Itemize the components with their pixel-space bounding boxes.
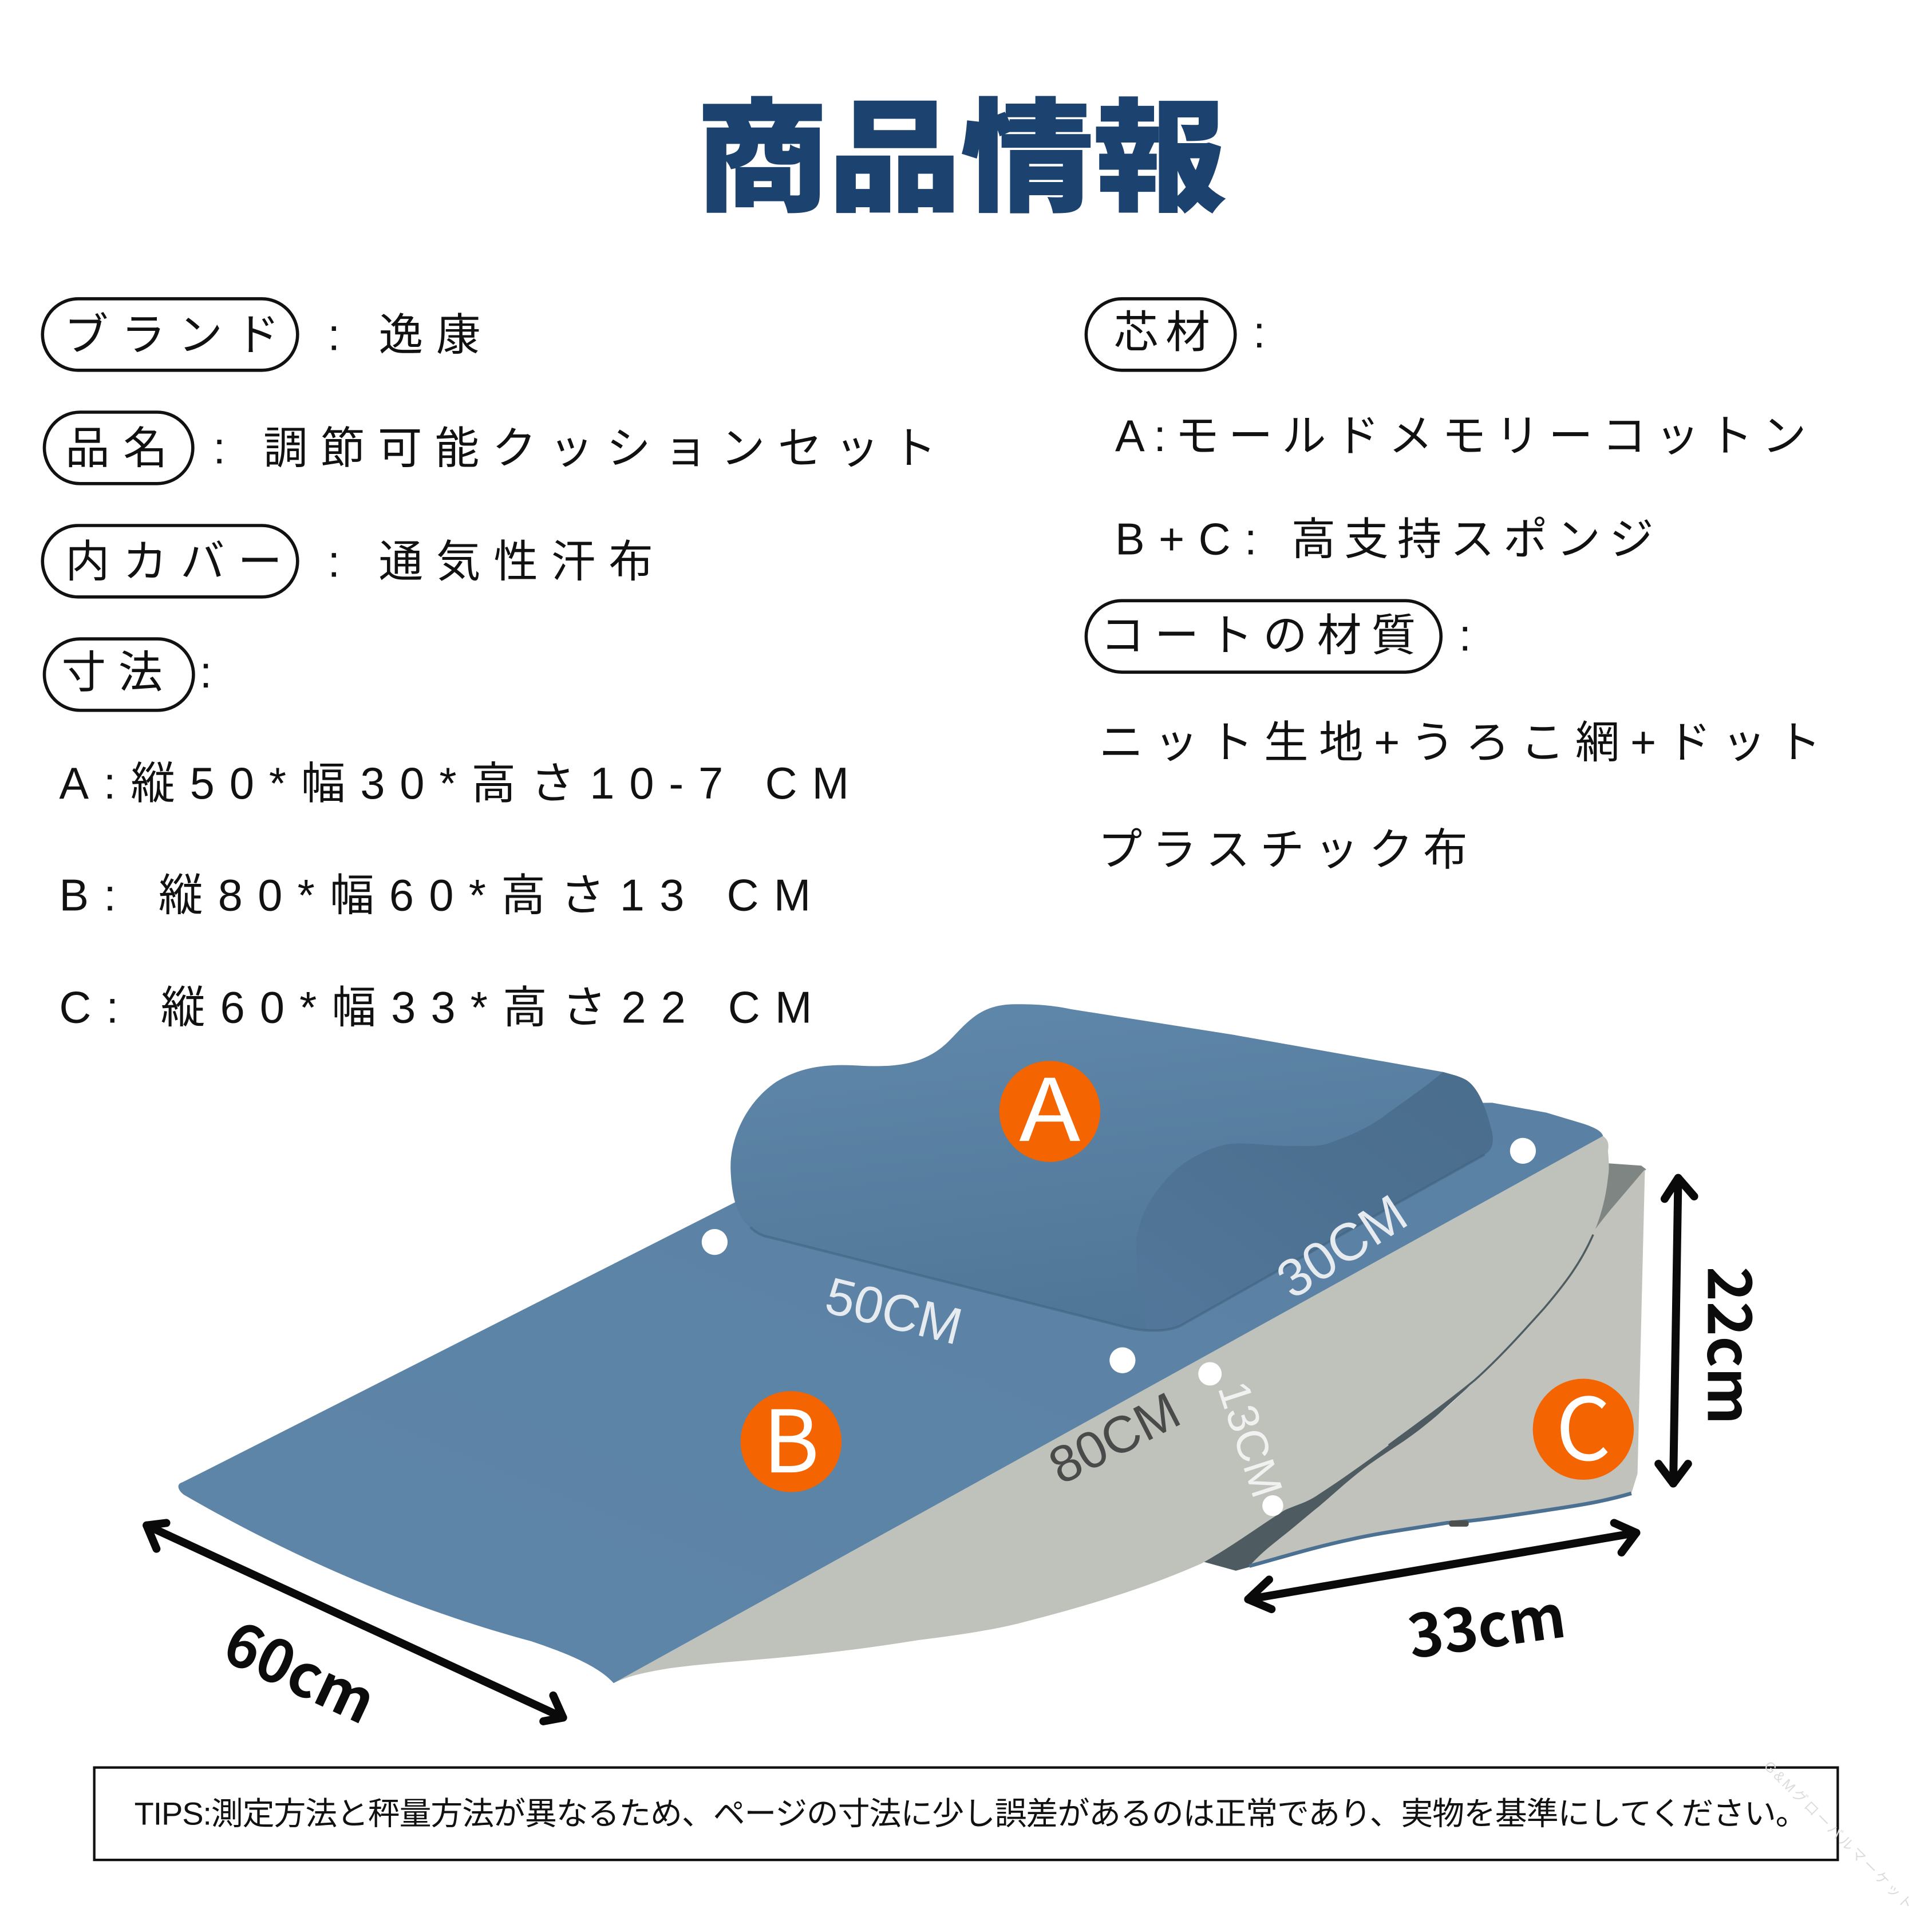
label: dimensions xyxy=(44,639,193,710)
dimension: 60cm: 60cm xyxy=(212,1596,392,1741)
wedge C xyxy=(1200,1163,1646,1570)
tips box xyxy=(94,1768,1838,1860)
panel: left spec list xyxy=(42,299,937,1033)
dimensions C: C: 縦60*幅33*高さ22 CM xyxy=(59,983,812,1033)
marker C xyxy=(1533,1361,1634,1485)
tips box: TIPS:測定方法と秤量方法が異なるため、ページの寸法に少し誤差があるのは正常であり、実物を基準にしてください。 xyxy=(135,1796,1808,1832)
marker A xyxy=(999,1041,1100,1166)
product illustration xyxy=(179,1004,1646,1683)
dimensions A: A:縦50*幅30*高さ10-7 CM xyxy=(59,759,849,808)
label: product name xyxy=(44,412,193,484)
label: product name: 品名 xyxy=(65,424,168,473)
value: inner cover: : 通気性汗布 xyxy=(328,537,653,586)
marker C: C xyxy=(1556,1361,1611,1485)
marker A: A xyxy=(1019,1041,1081,1166)
colon: core material: : xyxy=(1253,308,1266,357)
label: core material xyxy=(1086,299,1235,370)
label: 30CM: 30CM xyxy=(1266,1183,1417,1310)
colon: cover material: : xyxy=(1459,611,1471,660)
label: 50CM: 50CM xyxy=(820,1267,968,1356)
value: brand: : 逸康 xyxy=(328,310,480,359)
core material A: A:モールドメモリーコットン xyxy=(1115,412,1806,461)
wedge B top xyxy=(179,1103,1603,1683)
label: 80CM: 80CM xyxy=(1040,1381,1189,1495)
watermark: G&Mグローバルマーケット xyxy=(1761,1758,1916,1913)
core material B+C: 高支持スポンジ xyxy=(1291,515,1654,564)
label: brand xyxy=(42,299,298,370)
dimensions B: B: 縦80*幅60*高さ13 CM xyxy=(59,871,811,920)
label: dimensions: 寸法 xyxy=(62,648,163,697)
label: inner cover xyxy=(42,526,298,597)
core material B+C xyxy=(1115,515,1654,564)
title: 商品情報 xyxy=(696,60,1226,236)
cover material line 2: プラスチック布 xyxy=(1098,825,1468,875)
arrow: 22cm xyxy=(1658,1178,1694,1484)
arrow: 33cm xyxy=(1248,1523,1636,1609)
value: product name: : 調節可能クッションセット xyxy=(213,424,937,473)
dimension: 22cm: 22cm xyxy=(1690,1266,1776,1424)
label: cover material: コートの材質 xyxy=(1100,611,1416,660)
measure dots xyxy=(702,1138,1536,1516)
panel: right spec list xyxy=(1086,299,1821,875)
cover material line 1: ニット生地+うろこ網+ドット xyxy=(1099,718,1821,768)
colon: dimensions: : xyxy=(200,648,212,697)
seam line between wedges xyxy=(1389,1235,1593,1445)
wedge B side xyxy=(614,1136,1609,1683)
marker B: B xyxy=(762,1373,819,1498)
dimension: 33cm: 33cm xyxy=(1402,1568,1570,1676)
pillow end face xyxy=(1136,1072,1493,1330)
pillow base shadow xyxy=(750,1155,1485,1330)
label: cover material xyxy=(1086,600,1441,672)
label: 13CM: 13CM xyxy=(1208,1376,1291,1503)
arrow: 60cm xyxy=(147,1523,563,1721)
label: inner cover: 内カバー xyxy=(65,537,282,586)
marker B xyxy=(741,1373,841,1498)
label: brand: ブランド xyxy=(64,310,280,359)
label: core material: 芯材 xyxy=(1114,308,1210,357)
zipper pull xyxy=(1449,1520,1469,1527)
pillow A xyxy=(730,1004,1493,1330)
core material B+C: B+C: xyxy=(1115,515,1257,564)
